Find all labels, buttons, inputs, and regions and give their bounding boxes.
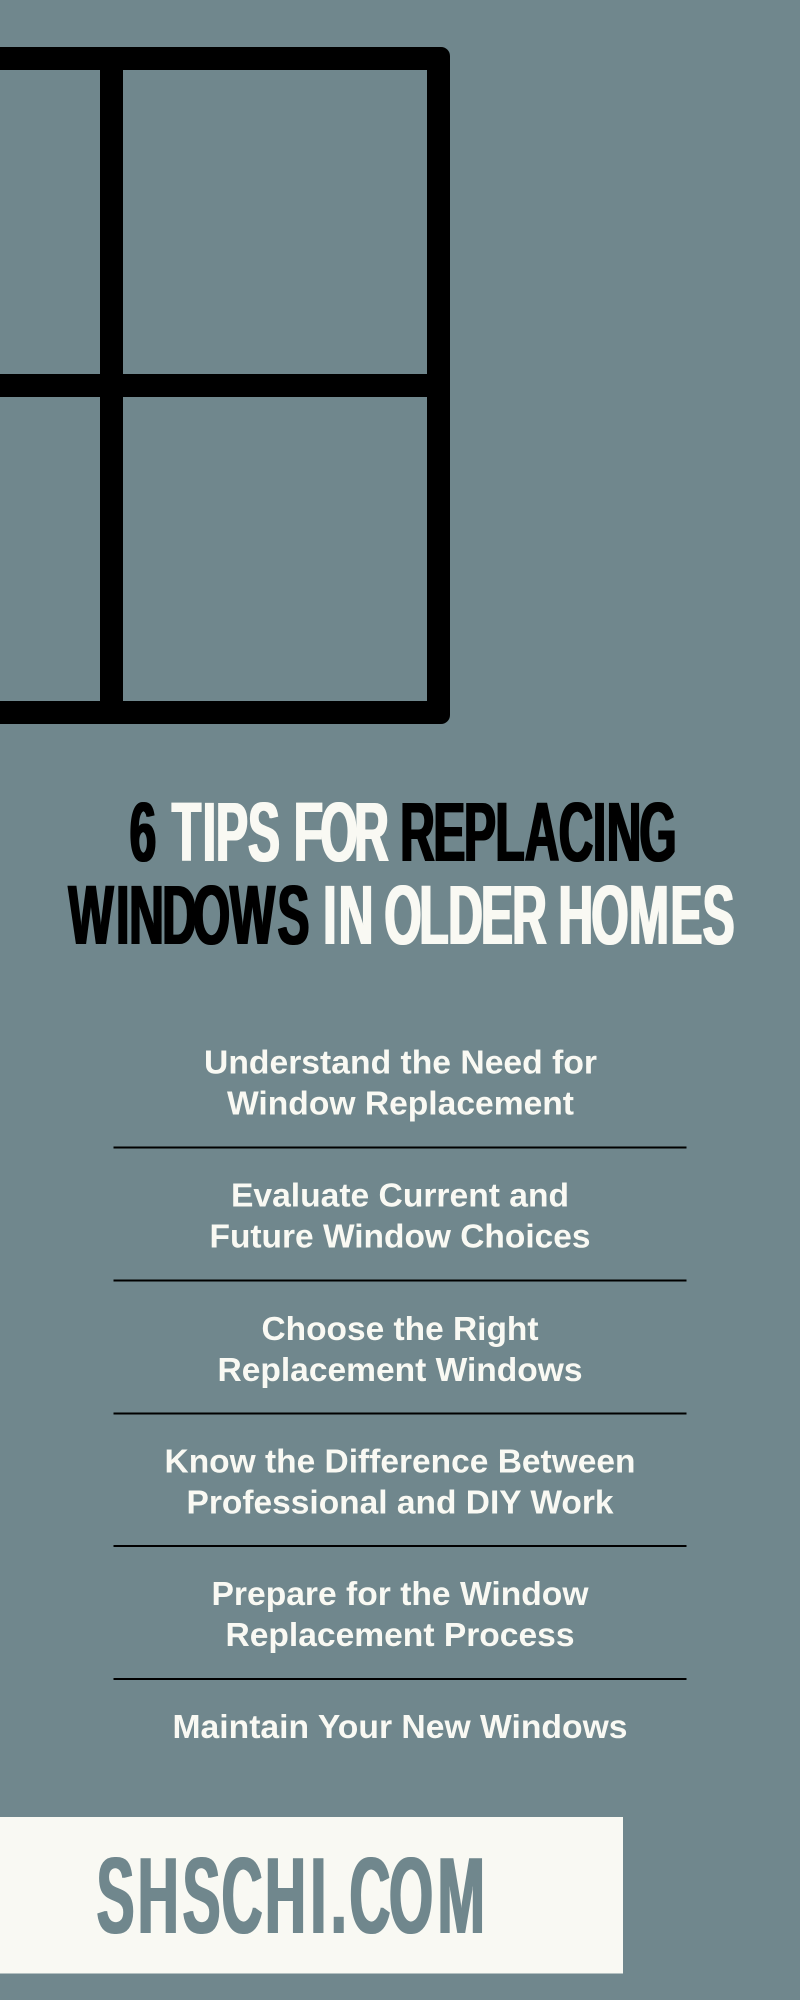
tip 3 bbox=[218, 1310, 582, 1388]
tip 6: Maintain Your New Windows bbox=[172, 1708, 628, 1745]
tip 4: Professional and DIY Work bbox=[186, 1484, 614, 1520]
tip 5 bbox=[212, 1575, 589, 1653]
tip 4 bbox=[164, 1442, 636, 1520]
title: REPLACING bbox=[400, 786, 677, 879]
website url: SHSCHI.COM bbox=[97, 1835, 485, 1957]
title: 6 bbox=[130, 786, 156, 879]
tip 4: Know the Difference Between bbox=[164, 1442, 636, 1480]
tip 3: Replacement Windows bbox=[218, 1351, 582, 1388]
tip 1: Understand the Need for bbox=[204, 1044, 597, 1080]
tip 2: Evaluate Current and bbox=[231, 1176, 569, 1214]
tip 5: Prepare for the Window bbox=[212, 1575, 589, 1612]
tip 5: Replacement Process bbox=[226, 1616, 574, 1653]
title bbox=[68, 786, 735, 962]
tip 1 bbox=[204, 1044, 597, 1122]
icon: window frame bbox=[0, 47, 450, 724]
title: IN OLDER HOMES bbox=[323, 869, 735, 962]
title: WINDOWS bbox=[68, 869, 309, 962]
title: TIPS FOR bbox=[172, 786, 389, 879]
tip 2: Future Window Choices bbox=[210, 1218, 590, 1254]
footer banner bbox=[0, 1817, 623, 1974]
tip 1: Window Replacement bbox=[227, 1084, 574, 1122]
tip 3: Choose the Right bbox=[262, 1310, 539, 1347]
tip 2 bbox=[210, 1176, 590, 1254]
